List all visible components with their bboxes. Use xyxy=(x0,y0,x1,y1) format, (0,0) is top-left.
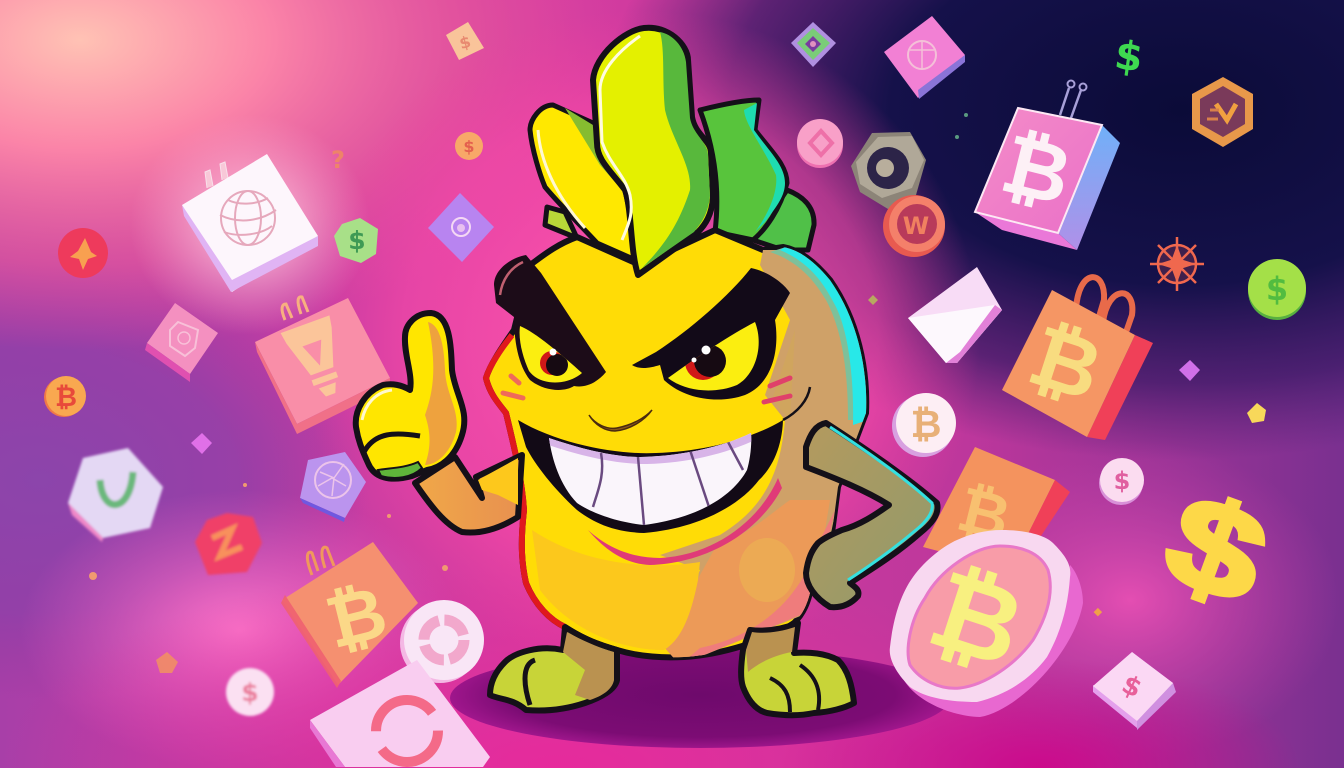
icon: white bitcoin coin: ₿ xyxy=(911,402,941,446)
icon: big pink bitcoin coin xyxy=(890,530,1083,717)
mascot: left eye glint xyxy=(550,348,556,356)
icon: white dollar coin right xyxy=(1099,458,1144,505)
icon: grey hex nut xyxy=(851,132,926,209)
icon: white bitcoin coin xyxy=(892,393,956,457)
mascot: body shading xyxy=(532,247,870,665)
icon: green dollar hexagon: $ xyxy=(348,226,366,255)
mascot: left arm xyxy=(415,455,522,533)
mascot: nose smile xyxy=(589,410,652,431)
icon: small olive diamond xyxy=(868,295,878,305)
mascot: right brow and eye socket xyxy=(632,268,790,400)
icon: red W coin: W xyxy=(903,212,929,240)
icon: big yellow dollar: $ xyxy=(1148,467,1284,632)
icon: funnel bag xyxy=(255,297,390,434)
icon: orange bitcoin bag xyxy=(281,542,418,688)
icon: orange bitcoin bag right xyxy=(1002,277,1153,440)
icon: white refresh coin xyxy=(400,600,484,683)
mascot: left leaf highlight xyxy=(538,130,585,228)
icon: orange hexagon V xyxy=(1192,77,1253,147)
icon: pink diamond coin xyxy=(797,119,843,168)
icon: white pentagon xyxy=(908,267,1002,363)
icon: dollar tag top xyxy=(446,22,484,60)
mascot xyxy=(356,28,938,715)
icon: red W coin xyxy=(883,195,945,257)
mascot: left eye xyxy=(520,326,582,382)
mascot: left brow and eye socket xyxy=(494,255,606,390)
icon: purple diamond xyxy=(428,193,494,262)
mascot: left foot xyxy=(490,627,617,711)
mascot: right eye xyxy=(668,322,759,390)
icon: colourful diamond top xyxy=(791,22,836,67)
mascot: mouth xyxy=(518,420,783,533)
mascot: mouth crease xyxy=(783,387,810,420)
icon: big white refresh tile xyxy=(310,660,490,767)
icon: red star coin xyxy=(58,228,108,278)
icon: orange bitcoin cube mid xyxy=(923,447,1070,570)
icon: bitcoin coin left: ₿ xyxy=(55,382,77,413)
icon: white hexagon U xyxy=(68,448,163,542)
icon: green dollar: $ xyxy=(1112,32,1146,82)
icon: yellow small diamond xyxy=(1247,403,1266,423)
icon: purple small square xyxy=(1179,360,1200,381)
icon: orange small diamond xyxy=(156,652,178,673)
icon: white dollar coin bottom xyxy=(226,668,274,716)
icon: bitcoin coin left xyxy=(44,376,86,417)
icon: white dollar coin bottom: $ xyxy=(241,678,259,707)
icon: orange bitcoin cube mid: ₿ xyxy=(951,472,1017,555)
icon: white globe cube xyxy=(182,154,318,292)
mascot: brow highlight xyxy=(500,262,523,295)
icon: small purple diamond xyxy=(191,433,212,454)
icon: white dollar coin right: $ xyxy=(1114,467,1130,495)
mascot: right leaf teal stripe xyxy=(744,103,785,232)
icon: question mark: ? xyxy=(331,146,345,174)
icon: white dollar tile bottom right xyxy=(1093,652,1176,730)
mascot: right eye glint xyxy=(692,346,710,362)
icon: dollar coin small xyxy=(455,132,483,160)
icon: dollar coin small: $ xyxy=(463,137,475,156)
mascot: cheek marks xyxy=(503,376,790,402)
icon: red hexagon Z xyxy=(195,513,262,575)
mascot: thumbs up hand xyxy=(356,313,464,479)
mascot: hair back leaves xyxy=(530,100,814,262)
mascot: body xyxy=(486,230,866,657)
icon: white dollar tile bottom right: $ xyxy=(1117,669,1146,704)
icon: green dollar coin xyxy=(1248,259,1306,320)
mascot: centre hair leaf xyxy=(593,28,713,275)
icon: bitcoin cube top right: ₿ xyxy=(992,116,1080,225)
icon: pink globe cube xyxy=(884,16,965,99)
icon: big pink bitcoin coin: ₿ xyxy=(915,546,1038,692)
icon: bitcoin cube top right xyxy=(975,80,1120,250)
icon: sparkle dots xyxy=(89,113,1102,616)
ground shadow xyxy=(450,648,950,748)
icon: pink tile xyxy=(145,303,218,382)
icon: violet globe hexagon xyxy=(300,452,366,522)
mascot: left leaf green side xyxy=(565,108,622,190)
mascot: right foot xyxy=(741,623,854,715)
icon: orange bitcoin bag: ₿ xyxy=(318,569,395,665)
mascot: right arm xyxy=(806,423,938,607)
icon: red compass xyxy=(1150,237,1204,291)
icon: dollar tag top: $ xyxy=(457,32,473,53)
icon: green dollar hexagon xyxy=(334,218,378,263)
mascot: red left outline xyxy=(486,335,565,627)
icon: green dollar coin: $ xyxy=(1266,270,1288,308)
icon: orange bitcoin bag right: ₿ xyxy=(1018,306,1113,420)
mascot: arm yellow patch xyxy=(478,458,518,505)
